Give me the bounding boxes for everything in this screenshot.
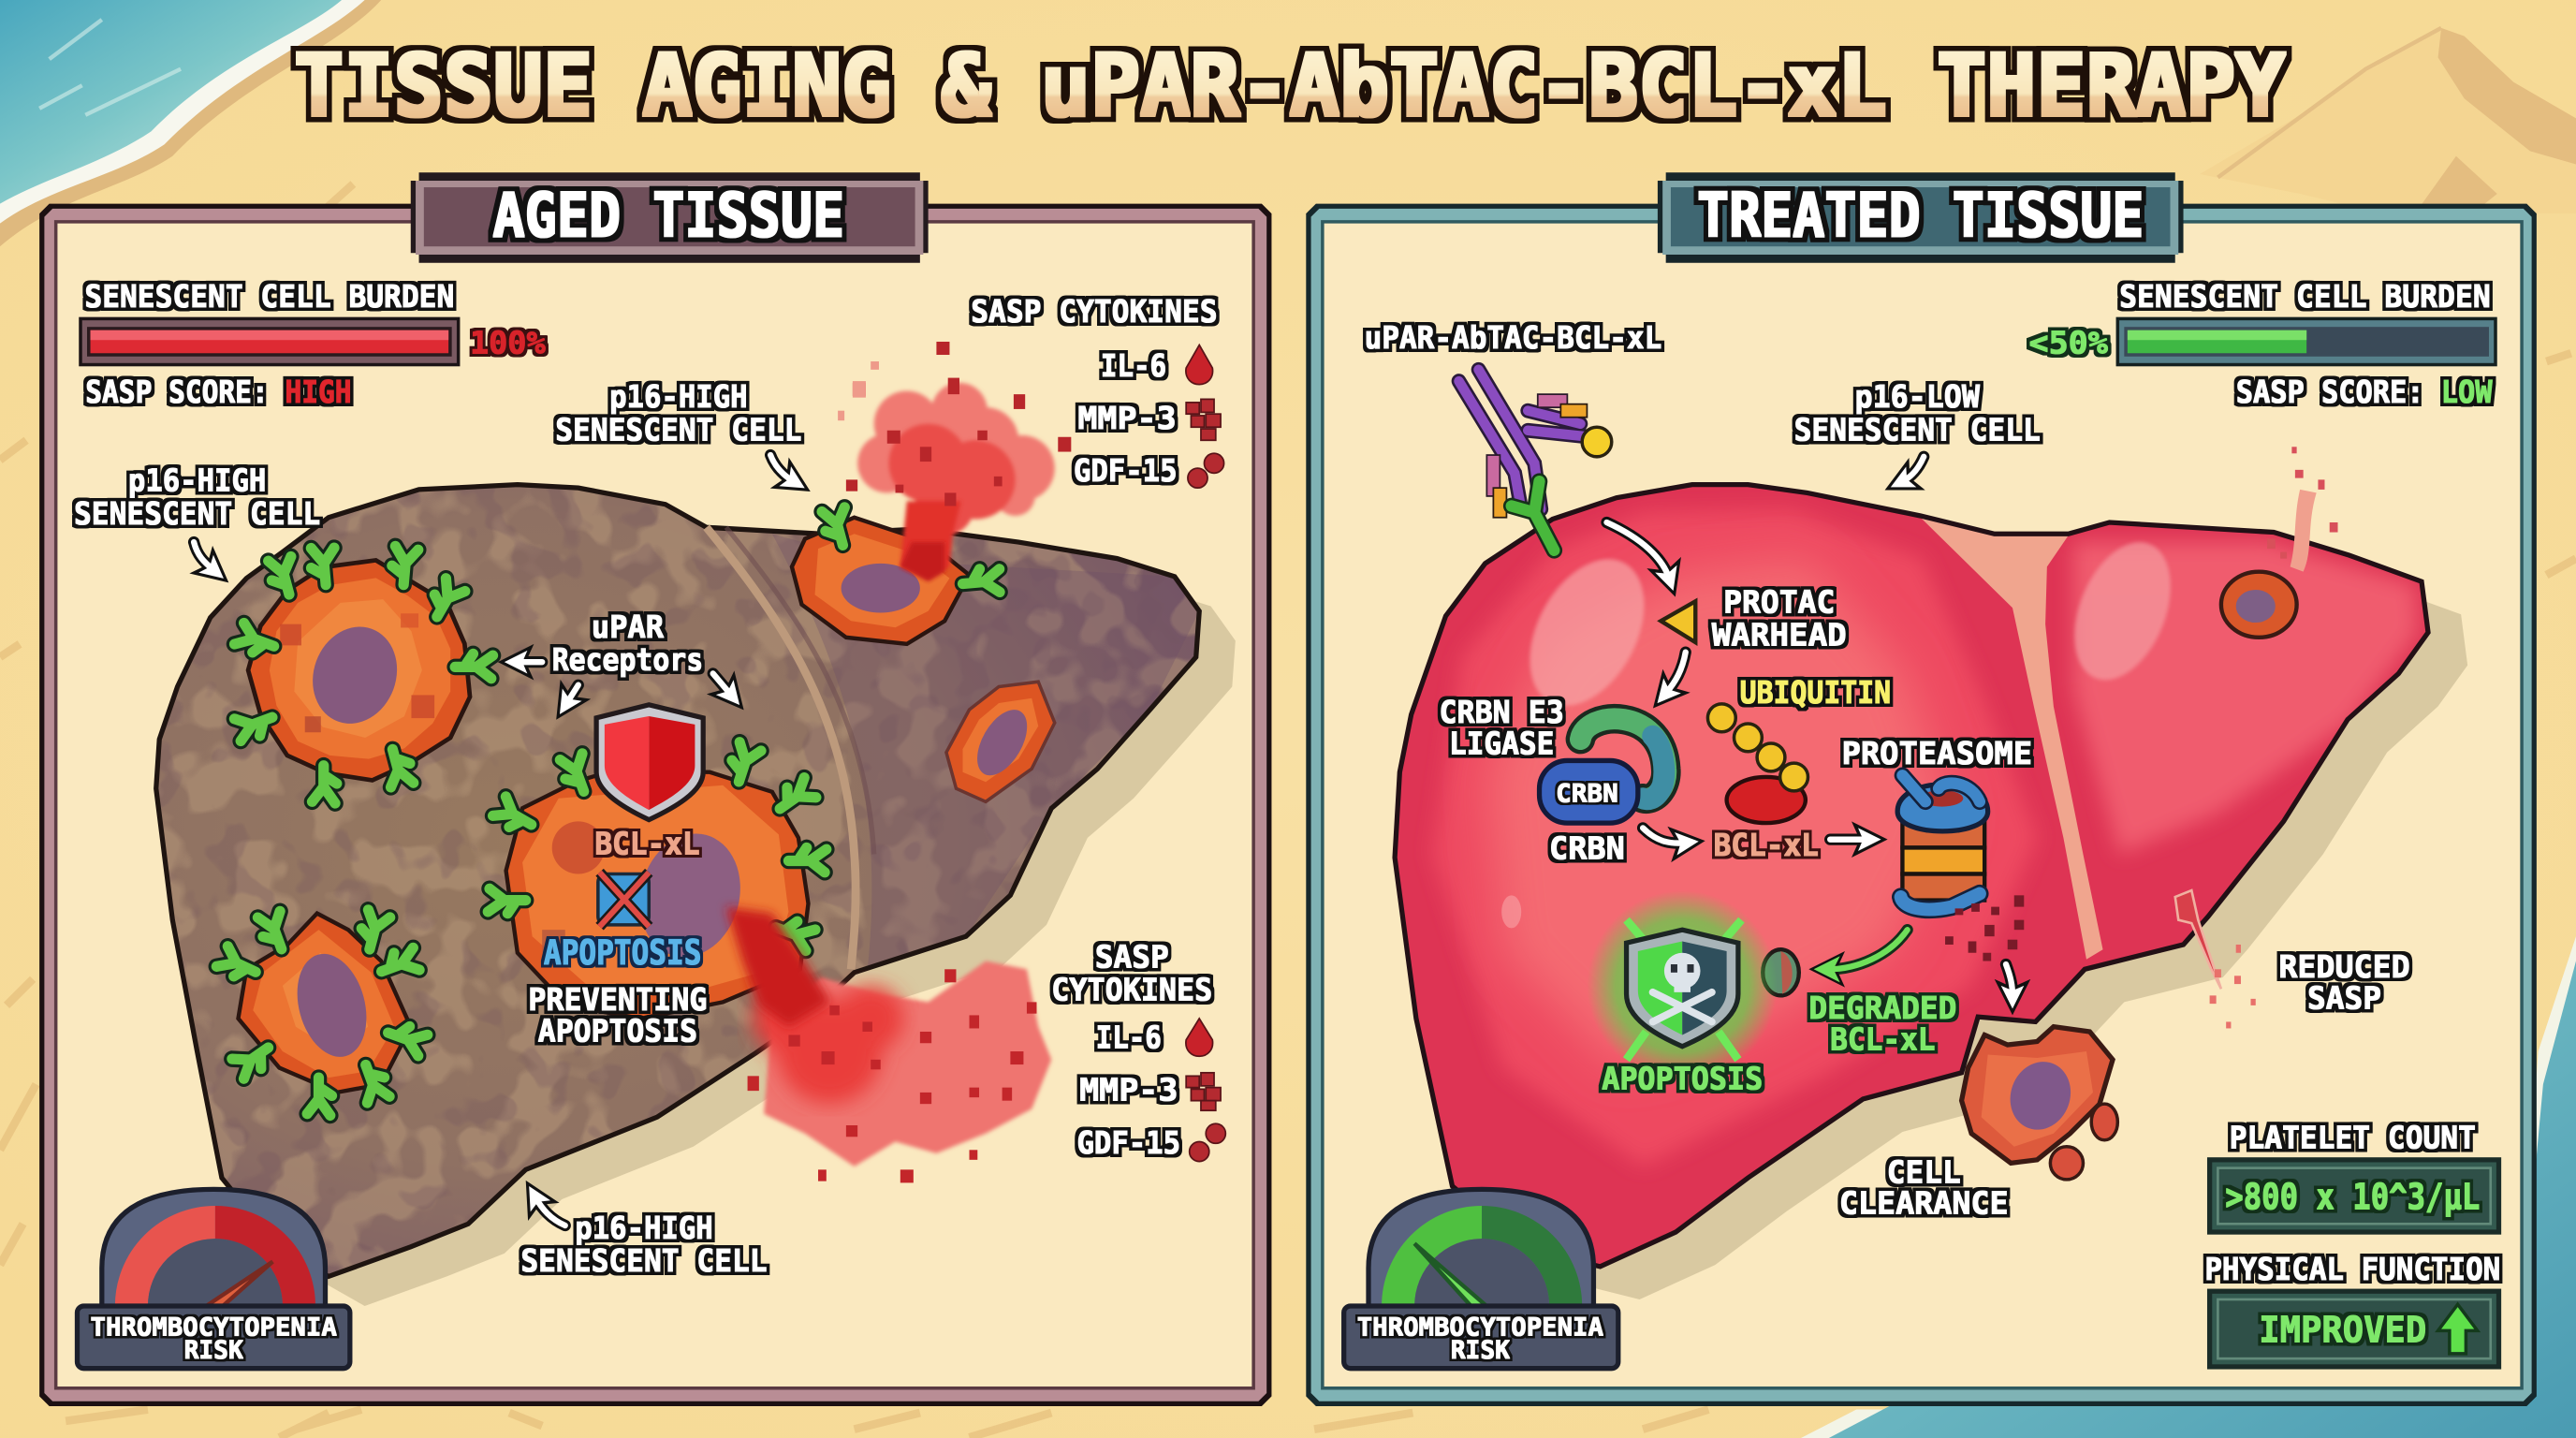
liver: treated [1395,485,2467,1299]
title: TISSUE AGING & uPAR-AbTAC-BCL-xL THERAPY [294,36,2285,136]
background: ocean bottom right [1799,936,2576,1438]
stat: platelet count: PLATELET COUNT [2230,1120,2476,1156]
label: p16-low cell: p16-LOW [1855,378,1981,415]
icon: MMP-3 mesh [1186,1073,1221,1110]
uPAR receptors on lower cell [216,909,428,1115]
label: p16-high cell bottom [520,1210,768,1279]
legend: SASP cytokines bottom: IL-6 [1096,1020,1162,1056]
stat: platelet count [2210,1120,2499,1232]
plume: top SASP cloud [838,342,1071,581]
icon: AbTAC antibody on receptor [1459,370,1612,550]
legend: SASP cytokines top: GDF-15 [1074,452,1178,489]
icon: apoptosis shield with skull [1587,890,1778,1081]
label: uPAR-AbTAC-BCL-xL: uPAR-AbTAC-BCL-xL [1365,319,1661,356]
arrow: to bottom edge [535,1197,565,1225]
arrow: BCL-xL to proteasome [1830,836,1868,843]
gauge: thrombocytopenia high: RISK [184,1337,243,1365]
label: CRBN E3 ligase: LIGASE [1449,725,1554,761]
burden meter: aged [80,278,546,365]
background: sand dune [2200,28,2576,213]
cell: p16-high lower left [216,909,428,1115]
icon: degraded BCL-xL [1763,949,1799,995]
SASP score: treated: SASP SCORE: LOW [2236,374,2493,410]
legend: SASP cytokines top [971,293,1224,489]
stat: platelet count: >800 x 10^3/µL [2225,1176,2480,1218]
legend: SASP cytokines bottom: GDF-15 [1076,1124,1180,1161]
arrow: to cell clearance [2006,964,2012,995]
legend: SASP cytokines top: MMP-3 [1077,400,1177,436]
legend: SASP cytokines bottom: SASP [1095,939,1169,976]
icon: IL-6 drop [1186,345,1213,385]
gauge: thrombocytopenia low [1344,1189,1618,1369]
icon: ubiquitinated BCL-xL [1707,704,1808,823]
progress bar: under half [2117,318,2496,365]
label: p16-high cell left: SENESCENT CELL [74,495,320,532]
panel frame [1306,204,2537,1406]
arrow: to left cell [194,542,213,570]
label: reduced SASP: REDUCED [2278,948,2410,985]
label: degraded BCL-xL: BCL-xL [1830,1020,1936,1057]
label: proteasome: PROTEASOME [1841,735,2032,771]
label: p16-high cell bottom: SENESCENT CELL [520,1242,768,1279]
icon: blocked apoptosis [598,873,649,927]
arrow: internalisation [1606,522,1669,579]
burden meter: treated [2029,278,2496,365]
cell: remnant senescent cell [2221,447,2338,638]
gauge: thrombocytopenia high: THROMBOCYTOPENIA [91,1314,337,1343]
label: BCL-xL: BCL-xL [594,825,700,861]
label: p16-low cell: SENESCENT CELL [1794,411,2041,448]
progress bar: full [80,318,459,365]
icon: CRBN E3 ligase [1540,719,1666,823]
stat: physical function: PHYSICAL FUNCTION [2204,1251,2500,1287]
panel: treated tissue [1306,172,2537,1406]
label: cell clearance: CELL [1887,1153,1961,1190]
label: degraded BCL-xL: DEGRADED [1808,990,1956,1026]
label: cell clearance: CLEARANCE [1839,1185,2009,1222]
cell: central senescent cell [488,741,827,1019]
gauge: thrombocytopenia high [77,1189,350,1369]
cell: small right lobe [946,682,1055,801]
liver: aged [156,485,1236,1306]
icon: CRBN E3 ligase: CRBN [1556,780,1618,808]
cell: p16-high upper left [233,546,493,803]
label: cell clearance [1839,1153,2009,1222]
shield: BCL-xL [596,705,703,820]
arrow: fragments to degraded BCL-xL [1828,930,1908,969]
legend: SASP cytokines bottom: MMP-3 [1079,1072,1178,1108]
stat: physical function [2204,1251,2500,1367]
label: PROTAC warhead: WARHEAD [1712,617,1847,653]
panel frame [39,204,1271,1406]
arrow: CRBN to BCL-xL [1643,828,1686,844]
icon: proteasome [1897,775,1988,909]
uPAR receptors on upper cell [233,546,493,803]
legend: SASP cytokines bottom [1051,939,1225,1162]
label: p16-high cell bottom: p16-HIGH [575,1210,713,1246]
label: apoptosis: APOPTOSIS [1602,1060,1763,1096]
label: preventing apoptosis [528,981,708,1049]
label: uPAR receptors [552,609,703,678]
arrows: uPAR receptors [518,662,731,703]
cell: p16-high upper right lobe [792,506,1002,644]
crack: reduced SASP [2175,890,2256,1028]
icon: cell being cleared [1962,1027,2117,1180]
panel: aged tissue [39,172,1271,1406]
arrow: warhead to ligase [1666,653,1686,693]
plume: lower SASP cloud [726,907,1051,1182]
panel header [1658,172,2184,263]
SASP score: aged: SASP SCORE: HIGH [85,374,352,410]
background: ocean top left [0,0,381,246]
label: uPAR receptors: uPAR [592,609,665,645]
label: p16-high cell top [555,378,801,448]
label: degraded BCL-xL [1808,990,1956,1057]
icon: GDF-15 [1190,1123,1225,1162]
label: reduced SASP: SASP [2307,979,2381,1016]
icon: GDF-15 [1188,453,1224,488]
label: p16-high cell left [74,462,320,532]
label: uPAR receptors: Receptors [552,641,703,678]
burden meter: aged: 100% [470,324,546,360]
arrow: to top cell [770,455,794,481]
panel header: AGED TISSUE [493,182,844,252]
icon: PROTAC warhead [1661,601,1695,642]
label: CRBN: CRBN [1549,830,1625,867]
label: ubiquitin: UBIQUITIN [1740,674,1891,711]
label: p16-high cell top: p16-HIGH [609,378,748,415]
panel header: TREATED TISSUE [1697,182,2144,252]
label: preventing apoptosis: PREVENTING [528,981,708,1018]
burden meter: treated: SENESCENT CELL BURDEN [2119,278,2491,315]
debris: degraded protein fragments [1945,895,2024,961]
label: CRBN E3 ligase: CRBN E3 [1439,694,1564,730]
arrow: to treated liver [1902,457,1924,481]
legend: SASP cytokines top: SASP CYTOKINES [971,293,1218,330]
icon: MMP-3 mesh [1186,399,1221,440]
label: PROTAC warhead: PROTAC [1723,584,1835,621]
stat: physical function: IMPROVED [2259,1310,2426,1352]
label: p16-low cell [1794,378,2041,448]
label: p16-high cell top: SENESCENT CELL [555,411,801,448]
gauge: thrombocytopenia low: THROMBOCYTOPENIA [1357,1314,1603,1343]
icon: up arrow [2438,1304,2478,1354]
receptors on central cell [488,741,827,951]
label: PROTAC warhead [1712,584,1847,653]
label: p16-high cell left: p16-HIGH [128,462,266,499]
label: preventing apoptosis: APOPTOSIS [538,1013,697,1049]
icon: IL-6 drop [1186,1019,1213,1056]
label: BCL-xL target: BCL-xL [1714,827,1819,863]
burden meter: treated: <50% [2029,324,2108,360]
panel header [411,172,929,263]
legend: SASP cytokines top: IL-6 [1101,347,1166,384]
legend: SASP cytokines bottom: CYTOKINES [1051,972,1212,1008]
label: apoptosis blocked: APOPTOSIS [544,932,701,973]
gauge: thrombocytopenia low: RISK [1451,1337,1510,1365]
label: CRBN E3 ligase [1439,694,1564,761]
burden meter: aged: SENESCENT CELL BURDEN [84,278,454,315]
label: reduced SASP [2278,948,2410,1016]
